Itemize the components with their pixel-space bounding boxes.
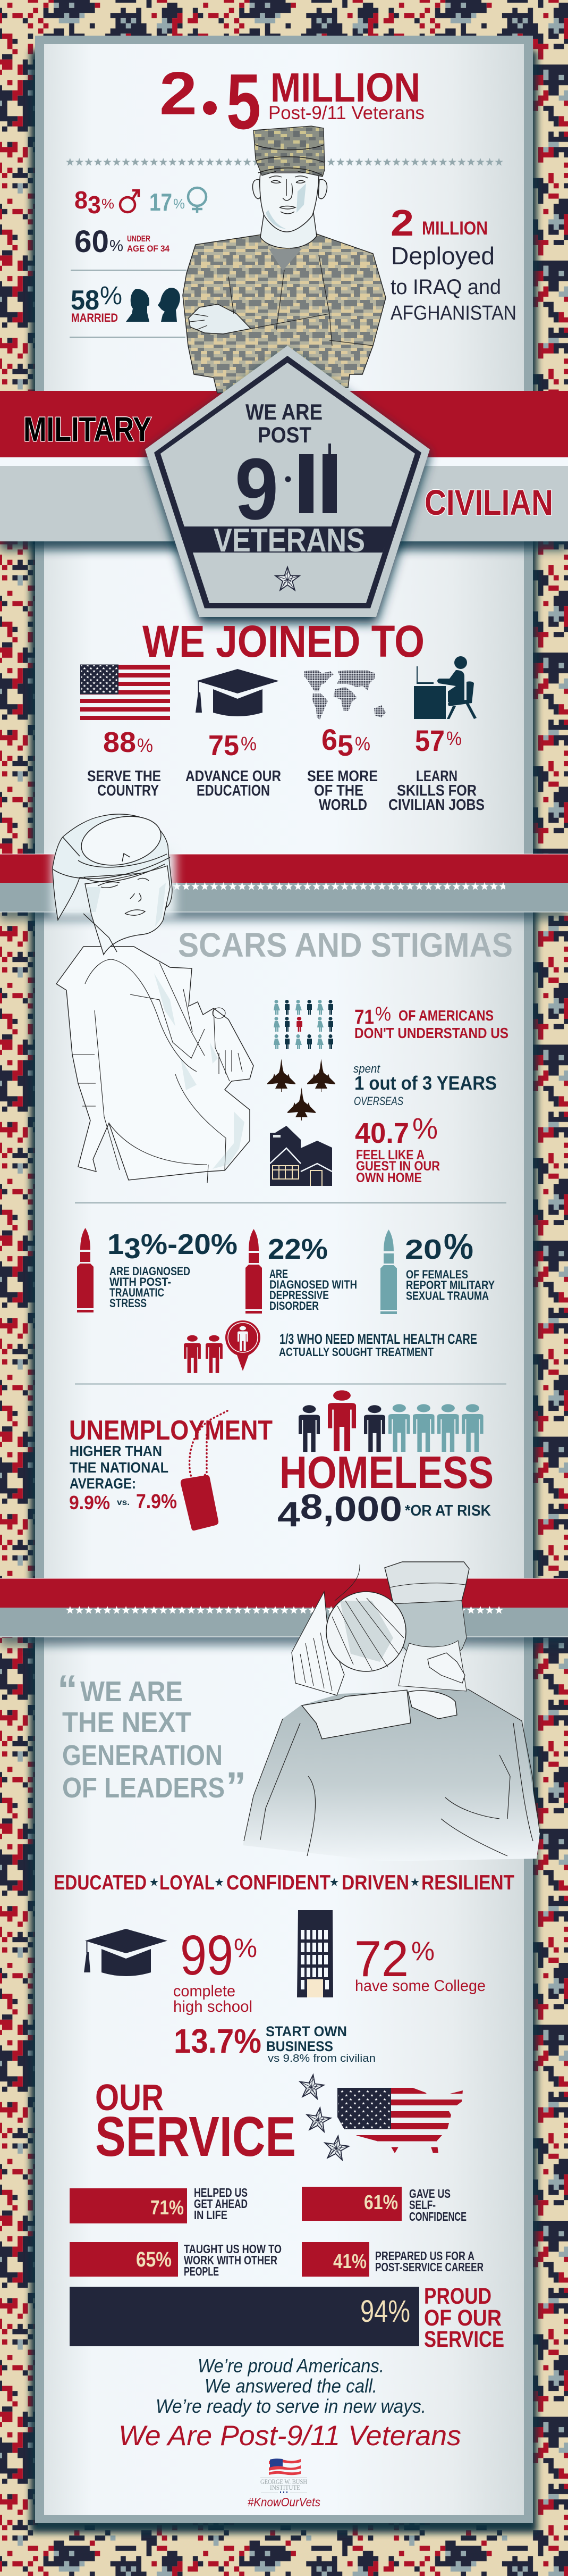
stat: 71% of americans: OF AMERICANS bbox=[399, 1007, 494, 1024]
text: one third sought treatment: 1/3 WHO NEED MENTAL HEALTH CARE bbox=[279, 1331, 477, 1347]
stat: 22% depressive disorder: DISORDER bbox=[269, 1299, 319, 1312]
stat: 40.7% guest in own home: GUEST IN OUR bbox=[356, 1159, 440, 1174]
stat: 60% under age of 34: UNDER bbox=[127, 235, 150, 244]
quote: next generation of leaders: “ bbox=[57, 1667, 78, 1712]
stat: 99% high school: % bbox=[234, 1933, 257, 1963]
stat: 72% some college: have some College bbox=[355, 1977, 486, 1995]
icon: college building bbox=[297, 1910, 333, 1997]
values row: LOYAL bbox=[159, 1871, 215, 1894]
stat: 1 out of 3 years: 1 out of 3 YEARS bbox=[354, 1072, 497, 1094]
stat: homeless 48,000: *OR AT RISK bbox=[405, 1502, 491, 1519]
woman's head bbox=[326, 1592, 406, 1671]
stat: 22% depressive disorder: DIAGNOSED WITH bbox=[269, 1278, 357, 1291]
bar: 41% post-service career: PREPARED US FOR A bbox=[375, 2249, 474, 2263]
stat: 88% serve the country: 88 bbox=[103, 726, 136, 758]
icon: usa flag map bbox=[337, 2088, 465, 2153]
stat: 13.7% start own business: BUSINESS bbox=[266, 2038, 333, 2054]
face bbox=[85, 866, 170, 955]
stat: 2 million deployed bbox=[391, 202, 516, 324]
stat: 75% advance our education: % bbox=[241, 733, 257, 755]
stat: 22% depressive disorder: ARE bbox=[269, 1267, 288, 1281]
stat: 57% learn skills: % bbox=[446, 727, 462, 749]
bar: 65% work with others: PEOPLE bbox=[184, 2264, 219, 2278]
stat: homeless 48,000: HOMELESS bbox=[279, 1448, 494, 1498]
stat: homeless 48,000 bbox=[277, 1448, 494, 1534]
heading: 2.5 million: 5 bbox=[226, 58, 261, 146]
stat: 13%-20% post-traumatic stress: 1 bbox=[107, 1228, 123, 1260]
logo: george w. bush institute: GEORGE W. BUSH bbox=[260, 2478, 307, 2486]
stat: 60% under age of 34: % bbox=[109, 237, 123, 255]
bar: 65% work with others bbox=[70, 2242, 282, 2278]
heading: 2.5 million bbox=[159, 58, 425, 146]
bar: 94% proud of our service: 94% bbox=[360, 2294, 410, 2329]
stat: 13.7% start own business: vs 9.8% from civilian bbox=[268, 2053, 376, 2064]
band: leaders bbox=[0, 1578, 568, 1645]
heading: our service bbox=[95, 2077, 296, 2168]
values row bbox=[54, 1871, 514, 1894]
band: scars and stigmas bbox=[0, 854, 568, 920]
bar: 41% post-service career bbox=[302, 2242, 484, 2277]
stat: homeless 48,000: ,000 bbox=[323, 1489, 402, 1528]
pentagon emblem: POST bbox=[258, 422, 311, 447]
band: military red / civilian grey bbox=[0, 391, 568, 550]
shirt and neck bbox=[269, 249, 302, 271]
stat: 13%-20% post-traumatic stress: WITH POST- bbox=[109, 1275, 171, 1289]
stat: 71% of americans: 71 bbox=[354, 1006, 374, 1028]
text: one third sought treatment: ACTUALLY SOUGHT TREATMENT bbox=[279, 1345, 434, 1359]
pentagon emblem: VETERANS bbox=[214, 522, 365, 559]
closing statement: We’re proud Americans. bbox=[198, 2355, 384, 2377]
stat: 57% learn skills: 57 bbox=[415, 724, 445, 757]
cap bbox=[253, 126, 325, 177]
stat: 40.7% guest in own home: OWN HOME bbox=[356, 1170, 422, 1185]
closing title: We Are Post-9/11 Veterans bbox=[118, 2420, 461, 2452]
stat: 20% females: % bbox=[444, 1226, 473, 1267]
icon: three stars bbox=[298, 2073, 350, 2161]
stat: homeless 48,000: 4 bbox=[277, 1494, 297, 1534]
stat: 2 million deployed: AFGHANISTAN bbox=[391, 302, 516, 324]
stat: 75% advance our education: EDUCATION bbox=[197, 782, 270, 799]
stat: 20% females: SEXUAL TRAUMA bbox=[406, 1289, 489, 1302]
stat: 83% male: 3 bbox=[88, 191, 101, 219]
stat: 58% married bbox=[71, 282, 180, 324]
stat: unemployment: vs. bbox=[117, 1498, 130, 1507]
icon: people grid bbox=[274, 1000, 333, 1049]
stat: 1 out of 3 years bbox=[353, 1062, 497, 1108]
man's cap bbox=[385, 1562, 469, 1604]
illustration: male soldier bbox=[183, 126, 386, 393]
icon: house bbox=[270, 1126, 332, 1186]
stat: unemployment: HIGHER THAN bbox=[70, 1443, 162, 1459]
bar: 65% work with others: TAUGHT US HOW TO bbox=[184, 2242, 282, 2256]
values row: RESILIENT bbox=[421, 1871, 514, 1894]
illustration: embrace bbox=[243, 1562, 540, 1861]
stat: 65% see more of the world: OF THE bbox=[314, 782, 363, 799]
icon: row of people bbox=[299, 1390, 484, 1452]
quote: next generation of leaders: THE NEXT bbox=[62, 1707, 191, 1738]
bar: 71% helped us: 71% bbox=[150, 2197, 184, 2219]
stat: 75% advance our education: ADVANCE OUR bbox=[185, 768, 281, 785]
stat: 13%-20% post-traumatic stress: 3 bbox=[124, 1233, 141, 1265]
bar: 71% helped us bbox=[70, 2186, 248, 2223]
bar: 94% proud of our service: PROUD bbox=[424, 2284, 491, 2309]
face bbox=[260, 173, 319, 232]
stat: 57% learn skills: LEARN bbox=[416, 768, 457, 785]
logo: george w. bush institute bbox=[260, 2458, 307, 2493]
stat: 60% under age of 34: AGE OF 34 bbox=[127, 244, 169, 254]
stat: 65% see more of the world: 5 bbox=[337, 729, 353, 762]
stat: 60% under age of 34 bbox=[74, 224, 169, 259]
veterans banner bbox=[184, 526, 392, 553]
stat: unemployment bbox=[69, 1415, 273, 1513]
bar: 65% work with others: WORK WITH OTHER bbox=[184, 2253, 277, 2267]
closing statement: We’re ready to serve in new ways. bbox=[156, 2395, 426, 2417]
heading: we joined to: WE JOINED TO bbox=[142, 616, 425, 666]
stat: 20% females: OF FEMALES bbox=[406, 1268, 468, 1281]
jacket shading bbox=[154, 973, 244, 1169]
stat: 88% serve the country: % bbox=[137, 734, 153, 756]
stat: 2 million deployed: 2 bbox=[391, 202, 414, 244]
bar: 61% self-confidence: CONFIDENCE bbox=[409, 2210, 467, 2223]
bar: 94% proud of our service: OF OUR bbox=[424, 2305, 502, 2331]
stat: 2 million deployed: to IRAQ and bbox=[391, 275, 501, 299]
bar: 71% helped us: GET AHEAD bbox=[194, 2197, 248, 2211]
stat: 1 out of 3 years: OVERSEAS bbox=[354, 1094, 403, 1108]
stat: 58% married: 58 bbox=[71, 285, 99, 316]
closing statement: We answered the call. bbox=[205, 2375, 377, 2397]
stat: 20% females bbox=[405, 1226, 495, 1302]
bar: 61% self-confidence: GAVE US bbox=[409, 2187, 451, 2201]
hashtag: #KnowOurVets bbox=[248, 2495, 320, 2509]
heading: our service: SERVICE bbox=[95, 2105, 296, 2168]
stat: 65% see more of the world: 6 bbox=[321, 723, 338, 756]
stat: unemployment: 7.9% bbox=[136, 1491, 177, 1513]
icon: graduation cap 2 bbox=[84, 1929, 167, 1976]
quote: next generation of leaders: OF LEADERS bbox=[62, 1772, 225, 1804]
stat: 75% advance our education: 75 bbox=[208, 730, 239, 762]
jacket seams bbox=[72, 959, 242, 1183]
icon: couple silhouettes bbox=[126, 288, 180, 322]
stat: 22% depressive disorder: DEPRESSIVE bbox=[269, 1289, 329, 1302]
values row: EDUCATED bbox=[54, 1871, 147, 1894]
bar: 41% post-service career: POST-SERVICE CAREER bbox=[375, 2260, 484, 2274]
stat: 88% serve the country: SERVE THE bbox=[87, 768, 161, 785]
hand and arm lines bbox=[189, 304, 251, 334]
stat: 20% females: 20 bbox=[405, 1234, 442, 1265]
stat: 57% learn skills bbox=[388, 724, 485, 814]
stat: 22% depressive disorder bbox=[268, 1233, 357, 1312]
stat: 71% of americans: % bbox=[375, 1003, 391, 1025]
stat: 13%-20% post-traumatic stress: ARE DIAGNOSED bbox=[109, 1265, 190, 1278]
stat: 13.7% start own business: 13.7% bbox=[174, 2022, 261, 2060]
quote: next generation of leaders: WE ARE bbox=[80, 1676, 183, 1708]
stat: 83% male: % bbox=[101, 196, 114, 212]
stat: 40.7% guest in own home: 40.7 bbox=[355, 1117, 409, 1149]
stat: unemployment: UNEMPLOYMENT bbox=[69, 1415, 273, 1446]
stat: 13.7% start own business: START OWN bbox=[266, 2023, 347, 2039]
star divider bbox=[65, 158, 504, 166]
bar: 41% post-service career: 41% bbox=[333, 2251, 367, 2273]
heading: our service: OUR bbox=[95, 2077, 164, 2118]
man's head bbox=[393, 1601, 467, 1654]
stat: 60% under age of 34: 60 bbox=[74, 224, 109, 259]
icon: american flag bbox=[80, 665, 170, 720]
stat: 99% high school bbox=[173, 1924, 257, 2015]
bar: 61% self-confidence: SELF- bbox=[409, 2198, 436, 2212]
emblem star bbox=[275, 567, 300, 590]
stat: 40.7% guest in own home: FEEL LIKE A bbox=[356, 1148, 425, 1162]
stat: 17% female bbox=[149, 188, 206, 216]
stat: 65% see more of the world: WORLD bbox=[319, 797, 367, 814]
stat: 20% females: REPORT MILITARY bbox=[406, 1278, 495, 1292]
stat: 2 million deployed: MILLION bbox=[422, 218, 488, 239]
icon: bullet red 2 bbox=[245, 1229, 262, 1314]
logo: george w. bush institute: INSTITUTE bbox=[270, 2484, 300, 2491]
icon: dotted world map bbox=[304, 670, 386, 720]
stat: 83% male: 8 bbox=[74, 186, 88, 214]
closing statement bbox=[156, 2355, 426, 2417]
bar: 71% helped us: IN LIFE bbox=[194, 2208, 227, 2222]
bar: 61% self-confidence: 61% bbox=[364, 2192, 398, 2214]
stat: 71% of americans: DON'T UNDERSTAND US bbox=[354, 1025, 508, 1041]
stat: 72% some college bbox=[354, 1930, 486, 1995]
stat: 75% advance our education bbox=[185, 730, 281, 799]
heading: scars and stigmas: SCARS AND STIGMAS bbox=[178, 926, 513, 964]
label: military: MILITARY bbox=[23, 410, 151, 448]
stat: 99% high school: 99 bbox=[180, 1924, 233, 1987]
stat: homeless 48,000: 8 bbox=[300, 1487, 323, 1526]
bar: 65% work with others: 65% bbox=[136, 2248, 172, 2271]
eyes nose mouth bbox=[269, 176, 308, 214]
stat: 88% serve the country bbox=[87, 726, 161, 799]
quote: next generation of leaders: GENERATION bbox=[62, 1739, 223, 1771]
stat: 13%-20% post-traumatic stress: %-20% bbox=[141, 1228, 238, 1260]
bar: 94% proud of our service bbox=[70, 2284, 504, 2352]
emblem shadow bbox=[145, 351, 430, 623]
torso bbox=[183, 233, 386, 393]
stat: 65% see more of the world: % bbox=[355, 733, 370, 755]
stat: 71% of americans bbox=[354, 1003, 508, 1041]
bar: 61% self-confidence bbox=[302, 2187, 467, 2223]
woman's arm and hand bbox=[302, 1690, 411, 1739]
stat: 99% high school: high school bbox=[173, 1998, 252, 2015]
stat: 22% depressive disorder: 22% bbox=[268, 1233, 328, 1265]
icon: bullet red 1 bbox=[77, 1228, 94, 1312]
values row: CONFIDENT bbox=[226, 1871, 330, 1894]
stat: 65% see more of the world bbox=[307, 723, 378, 814]
woman's ponytail bbox=[292, 1592, 344, 1695]
icon: three jets bbox=[267, 1059, 335, 1120]
stat: 72% some college: 72 bbox=[354, 1930, 409, 1987]
quote: next generation of leaders: ” bbox=[226, 1764, 246, 1809]
icon: bullet teal bbox=[380, 1230, 397, 1314]
emblem number 9-11 with towers bbox=[235, 440, 337, 538]
stat: unemployment: 9.9% bbox=[69, 1492, 110, 1513]
text: one third sought treatment bbox=[279, 1331, 477, 1359]
ears bbox=[252, 180, 327, 199]
values row: DRIVEN bbox=[342, 1871, 409, 1894]
jacket bbox=[56, 947, 253, 1180]
stat: 13.7% start own business bbox=[174, 2022, 376, 2064]
stat: 13%-20% post-traumatic stress bbox=[107, 1228, 238, 1310]
stat: 40.7% guest in own home: % bbox=[412, 1111, 438, 1145]
stat: 13%-20% post-traumatic stress: STRESS bbox=[109, 1297, 147, 1310]
goggles bbox=[53, 809, 170, 882]
heading: 2.5 million: 2 bbox=[159, 60, 197, 128]
stat: unemployment: THE NATIONAL bbox=[70, 1459, 168, 1476]
icon: person at desk bbox=[414, 656, 477, 719]
icon: people with map pin bbox=[184, 1320, 260, 1373]
stat: 2 million deployed: Deployed bbox=[391, 242, 495, 270]
stat: 58% married: MARRIED bbox=[71, 311, 118, 324]
bar: 94% proud of our service: SERVICE bbox=[424, 2327, 504, 2352]
stat: 57% learn skills: CIVILIAN JOBS bbox=[388, 797, 485, 814]
stat: 57% learn skills: SKILLS FOR bbox=[397, 782, 477, 799]
stat: 58% married: % bbox=[100, 282, 122, 310]
emblem number 9-11 with towers: 9 bbox=[235, 440, 278, 538]
facial features bbox=[83, 878, 149, 952]
stat: 83% male bbox=[74, 186, 139, 219]
helmet bbox=[53, 814, 172, 920]
pentagon emblem bbox=[145, 346, 430, 617]
man's back bbox=[243, 1689, 540, 1861]
stat: 17% female: 17 bbox=[149, 188, 172, 216]
quote: next generation of leaders bbox=[57, 1667, 246, 1809]
stat: unemployment: AVERAGE: bbox=[70, 1475, 136, 1492]
icon: graduation cap bbox=[196, 669, 279, 716]
stat: 40.7% guest in own home bbox=[355, 1111, 440, 1185]
illustration: female soldier bbox=[52, 809, 253, 1183]
stat: 13%-20% post-traumatic stress: TRAUMATIC bbox=[109, 1286, 164, 1299]
stat: 1 out of 3 years: spent bbox=[353, 1062, 380, 1075]
stat: 17% female: % bbox=[173, 196, 185, 212]
stat: 99% high school: complete bbox=[173, 1983, 235, 2000]
stat: 65% see more of the world: SEE MORE bbox=[307, 768, 378, 785]
icon: dog tag bbox=[181, 1411, 227, 1530]
stat: 88% serve the country: COUNTRY bbox=[97, 782, 159, 799]
bar: 71% helped us: HELPED US bbox=[194, 2186, 248, 2199]
heading: 2.5 million: Post-9/11 Veterans bbox=[268, 103, 425, 123]
stat: 72% some college: % bbox=[411, 1936, 435, 1966]
heading: 2.5 million: MILLION bbox=[270, 65, 420, 111]
emblem text: we are post: WE ARE bbox=[245, 399, 323, 424]
